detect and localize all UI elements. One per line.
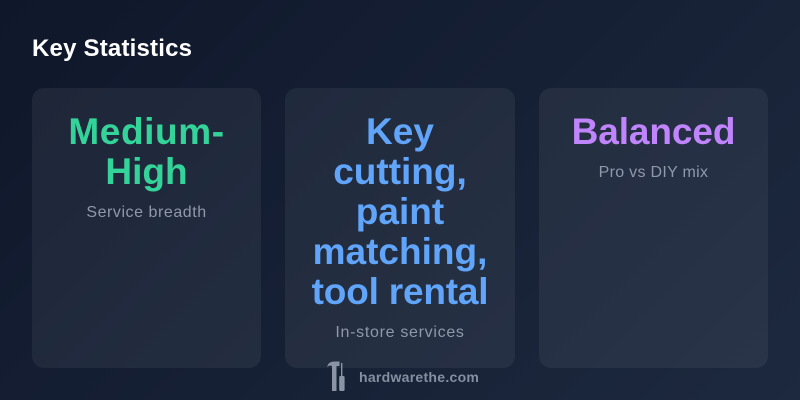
panel: service breadth: [32, 88, 261, 368]
panel: in-store services: [285, 88, 515, 368]
stat label: pro vs DIY mix: Pro vs DIY mix: [599, 164, 708, 181]
stat value: Medium-High: [68, 111, 225, 192]
stat label: service breadth: Service breadth: [86, 204, 207, 221]
stat value: services list: cutting,: [333, 151, 467, 192]
stat value: services list: matching,: [313, 231, 487, 272]
title: Key Statistics: [32, 35, 192, 62]
stat value: Medium-High: Medium-: [68, 111, 225, 152]
icon: hammer and screwdriver: [327, 362, 345, 391]
brand: hardwarethe.com: hardwarethe.com: [359, 369, 479, 385]
stat value: services list: paint: [356, 191, 444, 232]
stat value: services list: [312, 111, 488, 312]
stat label: in-store services: In-store services: [335, 324, 465, 341]
stat value: services list: Key: [366, 111, 434, 152]
panel: pro vs DIY mix: [539, 88, 768, 368]
stat value: Medium-High: High: [105, 151, 188, 192]
stat value: Balanced: Balanced: [572, 111, 735, 152]
stat value: services list: tool rental: [312, 271, 488, 312]
